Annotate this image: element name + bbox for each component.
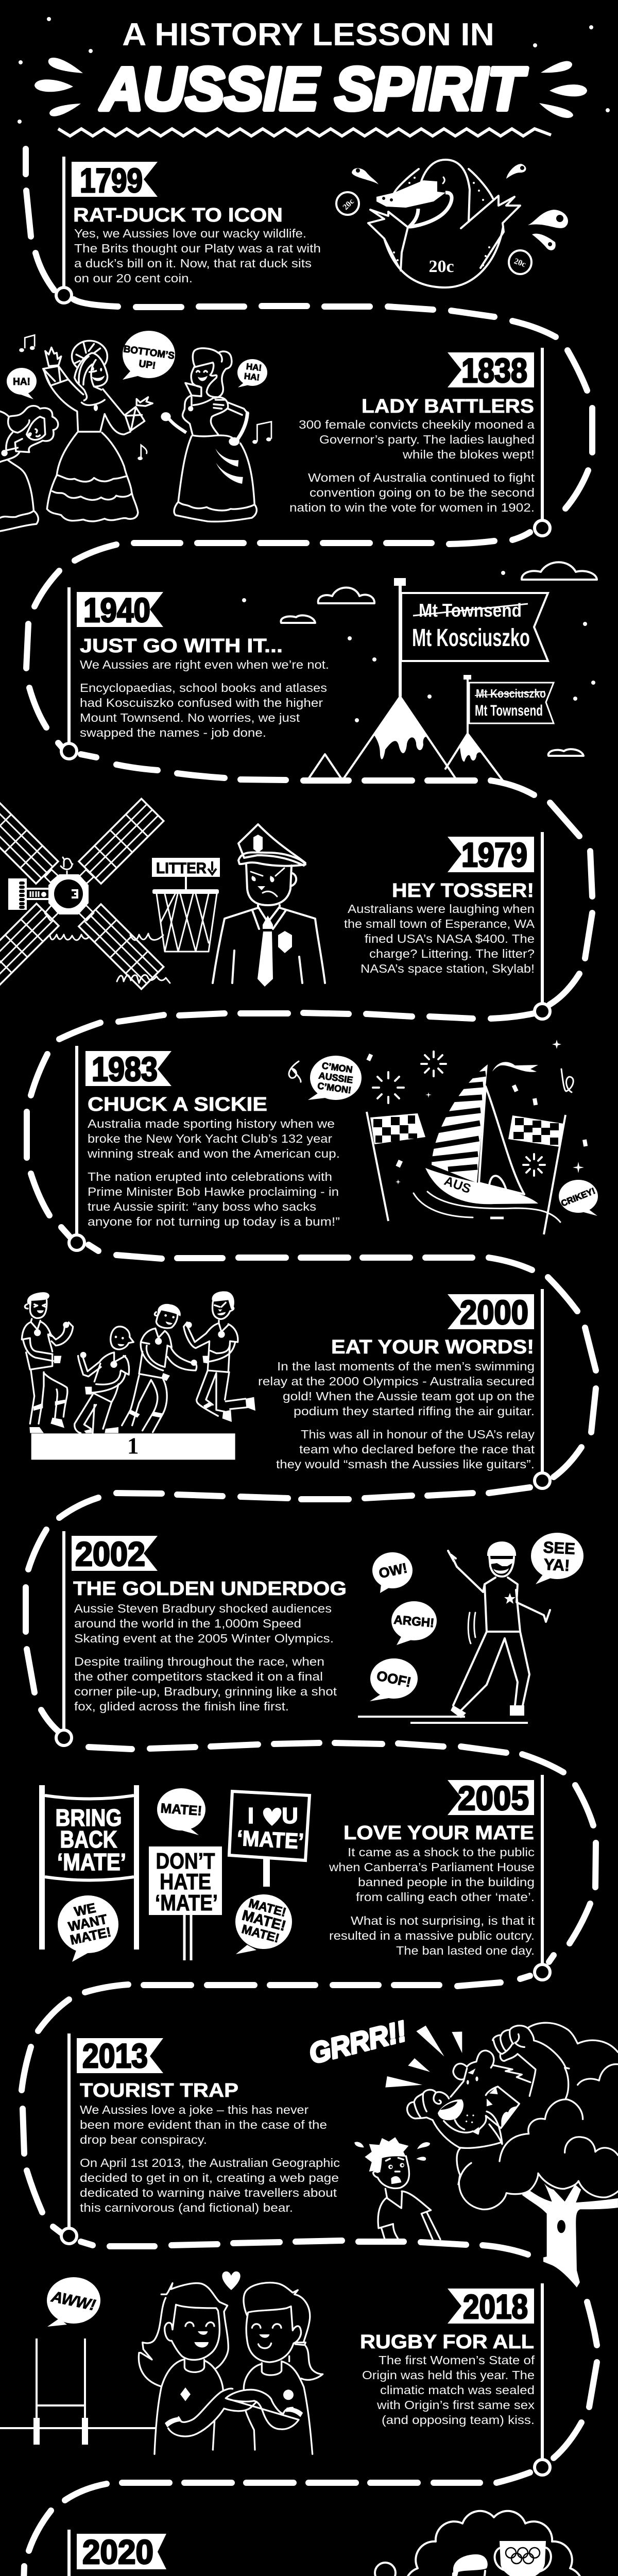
banner: bring back mate	[39, 1785, 139, 1950]
lady centre	[43, 341, 152, 521]
body text	[329, 1845, 535, 1957]
grass	[50, 934, 170, 983]
yacht	[414, 1062, 560, 1222]
speech bubble: aww	[47, 2277, 100, 2327]
body text: Mount Townsend. No worries, we just	[80, 711, 300, 724]
speech bubble: see ya: YA!	[543, 1555, 570, 1574]
speech bubble: c'mon aussie c'mon: C’MON	[321, 1060, 353, 1075]
panel: 2002 the golden underdog	[56, 1531, 583, 1745]
flag pole and node	[535, 1289, 550, 1488]
illustration: litter bin	[152, 858, 220, 952]
heading: LOVE YOUR MATE	[344, 1822, 534, 1844]
clasped arms	[165, 2388, 303, 2450]
illustration: drop bear in tree	[306, 2014, 618, 2287]
speech bubble: ha	[7, 368, 37, 399]
illustration: skylab space station	[0, 799, 170, 989]
body text	[344, 902, 535, 975]
flag pole and node	[61, 587, 77, 759]
illustration: swimmers on podium	[22, 1291, 255, 1460]
speech bubble: c'mon aussie c'mon: AUSSIE	[318, 1070, 354, 1086]
speech bubble: we want mate	[58, 1895, 118, 1962]
body text: This was all in honour of the USA’s relay	[301, 1428, 535, 1441]
panel: 1799 rat-duck to icon	[56, 157, 568, 303]
body text: Governor’s party. The ladies laughed	[319, 433, 535, 446]
big flag: Mt Kosciuszko	[412, 624, 530, 652]
speech bubble: see ya	[531, 1533, 583, 1584]
speech bubble: see ya: SEE	[543, 1538, 576, 1558]
grrr text: GRRR!!	[306, 2014, 409, 2070]
flag pole and node	[535, 2283, 550, 2475]
body text: decided to get in on it, creating a web page	[80, 2171, 339, 2184]
body text	[87, 1117, 340, 1228]
body text: It came as a shock to the public	[348, 1845, 535, 1859]
small flag	[464, 675, 554, 734]
panel: 2018 rugby for all	[0, 2272, 550, 2475]
body text	[80, 658, 329, 739]
speech bubble: ha ha	[237, 359, 267, 387]
speech bubble: mate mate mate: MATE!	[241, 1907, 287, 1934]
lady left cut off	[0, 406, 58, 531]
body text: resulted in a massive public outcry.	[329, 1929, 535, 1942]
speech bubble: mate mate mate	[235, 1894, 292, 1954]
body text: We Aussies are right even when we’re not.	[80, 658, 329, 671]
body text: Despite trailing throughout the race, when	[74, 1655, 324, 1668]
speech bubble: mate: MATE!	[160, 1800, 202, 1819]
speech bubble: oof: OOF!	[375, 1668, 413, 1690]
illustration: platypus on 20 cent coin: 20c	[428, 257, 454, 276]
body text: (and opposing team) kiss.	[382, 2413, 535, 2427]
body text: 300 female convicts cheekily mooned a	[299, 418, 535, 431]
body text: charge? Littering. The litter?	[369, 947, 535, 960]
swimmer with trophy	[407, 2541, 562, 2576]
body text: Australia made sporting history when we	[88, 1117, 335, 1130]
speech bubble: ow	[372, 1552, 413, 1593]
body text: Yes, we Aussies love our wacky wildlife.	[74, 227, 306, 240]
sparkles and confetti	[366, 1040, 588, 1184]
illustration: mountains with flags	[242, 562, 597, 783]
music notes	[19, 335, 271, 460]
sign: don't hate mate	[149, 1846, 222, 1960]
flag pole and node	[535, 348, 550, 536]
heading: HEY TOSSER!	[392, 880, 534, 902]
title	[99, 17, 528, 123]
year flag 2005: 2005	[458, 1779, 529, 1817]
panel: 2000 eat your words	[22, 1289, 550, 1488]
stars	[242, 571, 595, 722]
body text: on our 20 cent coin.	[74, 272, 193, 285]
body text: this carnivorous (and fictional) bear.	[80, 2201, 293, 2214]
big flag	[394, 578, 548, 697]
illustration: platypus on 20 cent coin: 20c	[513, 257, 527, 269]
fireworks	[373, 1052, 545, 1176]
body text: Encyclopaedias, school books and atlases	[80, 681, 327, 694]
body text: the other competitors stacked it on a final	[74, 1670, 323, 1683]
illustration: dancing ladies	[0, 331, 271, 531]
panel: 2020 swim between the flags	[61, 2511, 582, 2576]
year flag 2013: 2013	[82, 2037, 148, 2075]
swimmer 2	[75, 1327, 133, 1433]
year flag 1838: 1838	[461, 351, 527, 389]
body text: convention going on to be the second	[310, 486, 535, 499]
small flag: Mt Kosciuszko	[476, 687, 546, 700]
body text: In the last moments of the men’s swimming	[277, 1360, 535, 1373]
speech bubble: mate mate mate: MATE!	[240, 1922, 281, 1945]
speech bubble: c'mon aussie c'mon: C’MON!	[317, 1080, 352, 1095]
frightened tourist	[354, 2137, 440, 2240]
body text: NASA’s space station, Skylab!	[360, 962, 535, 975]
speech bubble: we want mate: MATE!	[68, 1924, 112, 1948]
body text	[80, 2103, 340, 2214]
speech bubble: ha: HA!	[13, 377, 30, 387]
body text	[289, 418, 535, 514]
body text: Origin was held this year. The	[362, 2368, 535, 2382]
body text: banned people in the building	[358, 1875, 535, 1889]
body text: team who declared before the race that	[299, 1443, 535, 1456]
heading: TOURIST TRAP	[80, 2080, 238, 2102]
speech bubble: ow: OW!	[377, 1560, 408, 1581]
body text: podium they started riffing the air guitar.	[294, 1404, 535, 1418]
body text: a duck’s bill on it. Now, that rat duck sits	[74, 257, 312, 270]
sign: i love u mate	[229, 1791, 310, 1887]
sign: i love u mate: U	[282, 1803, 298, 1828]
speech bubble: we want mate: WANT	[67, 1911, 109, 1935]
body text: corner pile-up, Bradbury, grinning like a shot	[74, 1685, 337, 1698]
speech bubble: ha ha: HA!	[246, 362, 262, 373]
body text: fined USA’s NASA $400. The	[365, 932, 535, 945]
swimmer 4	[184, 1291, 255, 1422]
body text: Australians were laughing when	[348, 902, 535, 916]
body text: On April 1st 2013, the Australian Geographic	[80, 2156, 340, 2170]
heading: THE GOLDEN UNDERDOG	[73, 1578, 347, 1600]
heading: CHUCK A SICKIE	[88, 1094, 267, 1115]
sign: don't hate mate: HATE	[160, 1869, 211, 1894]
flag pole and node	[69, 1046, 84, 1250]
body text: The nation erupted into celebrations with	[88, 1170, 332, 1183]
banner: bring back mate: BRING	[56, 1804, 122, 1831]
body text: with Origin’s first same sex	[376, 2398, 535, 2412]
body text: Prime Minister Bob Hawke proclaiming - in	[88, 1185, 339, 1198]
speech bubble: we want mate: WE	[73, 1900, 97, 1920]
thought bubbles	[361, 2563, 396, 2576]
thought cloud	[405, 2511, 582, 2576]
year flag 1940: 1940	[83, 591, 150, 629]
heading: RUGBY FOR ALL	[360, 2331, 534, 2353]
decorative title dots	[18, 17, 610, 124]
year flag 1983: 1983	[92, 1050, 158, 1088]
speech bubble: c'mon aussie c'mon	[308, 1056, 362, 1100]
panel: 2013 tourist trap	[61, 2014, 618, 2287]
body text: dedicated to warning naive travellers about	[80, 2186, 337, 2199]
bear	[407, 2026, 569, 2184]
podium	[31, 1433, 235, 1460]
body text: fox, glided across the finish line first.	[74, 1700, 289, 1713]
year flag 2018: 2018	[463, 2287, 528, 2326]
body text: from calling each other ‘mate’.	[356, 1890, 535, 1904]
yacht: AUS	[442, 1174, 473, 1196]
heading: LADY BATTLERS	[362, 396, 534, 417]
body text: We Aussies love a joke – this has never	[80, 2103, 308, 2116]
goal posts	[0, 2338, 156, 2445]
body text: winning streak and won the American cup.	[87, 1147, 340, 1160]
speech bubble: bottom's up	[123, 331, 175, 380]
speech bubble: bottom's up: BOTTOM’S	[123, 344, 175, 362]
mountains	[309, 697, 505, 783]
illustration: kissing players and goal posts	[0, 2272, 323, 2454]
body text	[74, 227, 321, 285]
body text	[258, 1360, 535, 1471]
sign: i love u mate: ‘MATE’	[236, 1826, 304, 1853]
body text: nation to win the vote for women in 1902.	[289, 501, 535, 514]
banner: bring back mate: BACK	[60, 1826, 117, 1853]
body text: around the world in the 1,000m Speed	[74, 1617, 301, 1630]
panel: 1838 lady battlers	[0, 331, 550, 536]
body text: Women of Australia continued to fight	[308, 471, 535, 484]
flag pole and node	[56, 1531, 72, 1745]
flag pole and node	[56, 157, 72, 303]
illustration: speed skater	[358, 1533, 583, 1723]
body text	[74, 1602, 337, 1713]
body text: climatic match was sealed	[380, 2383, 535, 2397]
body text	[362, 2353, 535, 2427]
body text: drop bear conspiracy.	[80, 2133, 207, 2146]
title splash drops	[35, 58, 587, 118]
panel: 1979 hey tosser	[0, 799, 550, 1019]
illustration: yacht celebration	[289, 1040, 598, 1234]
illustration: protest signs	[39, 1785, 310, 1962]
heading: EAT YOUR WORDS!	[331, 1336, 534, 1358]
body text: while the blokes wept!	[402, 448, 535, 461]
player right	[244, 2283, 323, 2454]
year flag 1799: 1799	[80, 161, 143, 199]
speech bubble: mate	[157, 1788, 205, 1835]
year flag 2002: 2002	[75, 1535, 145, 1573]
title: AUSSIE SPIRIT	[99, 55, 528, 123]
flag pole and node	[61, 2530, 77, 2576]
player left	[139, 2283, 228, 2454]
flag pole and node	[535, 1775, 550, 1980]
sign: don't hate mate: ‘MATE’	[155, 1890, 218, 1916]
illustration: man dreaming of olympic gold	[291, 2511, 582, 2576]
illustration: policeman	[213, 824, 325, 987]
year flag 2000: 2000	[460, 1293, 528, 1331]
body text: Skating event at the 2005 Winter Olympics.	[74, 1632, 334, 1645]
speech bubble: argh: ARGH!	[393, 1613, 435, 1630]
body text: What is not surprising, is that it	[351, 1914, 535, 1927]
body text: The ban lasted one day.	[396, 1944, 535, 1957]
small flag: Mt Townsend	[475, 702, 543, 719]
body text: The first Women’s State of	[379, 2353, 535, 2367]
body text: true Aussie spirit: “any boss who sacks	[88, 1200, 316, 1213]
shout spikes	[385, 2026, 462, 2088]
sign: don't hate mate: DON’T	[156, 1849, 215, 1874]
swimmer 3	[122, 1304, 197, 1432]
panel: 1940 just go with it	[61, 562, 597, 783]
year flag 2020: 2020	[82, 2533, 153, 2571]
body text: broke the New York Yacht Club’s 132 year	[88, 1132, 332, 1145]
zigzag divider	[58, 129, 551, 136]
year flag 1979: 1979	[461, 836, 527, 874]
flag pole and node	[535, 832, 550, 1019]
speech bubble: crikey	[559, 1180, 598, 1216]
lady right	[161, 348, 256, 521]
illustration: platypus on 20 cent coin: 20c	[341, 197, 356, 212]
banner: bring back mate: ‘MATE’	[57, 1849, 126, 1875]
flags	[367, 1112, 565, 1234]
illustration: platypus on 20 cent coin	[336, 160, 568, 287]
speech bubble: ha ha: HA!	[244, 371, 260, 382]
body text: gold! When the Aussie team got up on the	[283, 1389, 535, 1403]
tree	[459, 2023, 618, 2287]
body text: been more evident than in the case of the	[80, 2118, 327, 2131]
panel: 1983 chuck a sickie	[69, 1040, 598, 1250]
speech bubble: argh	[391, 1601, 437, 1645]
panel: 2005 love your mate	[39, 1775, 550, 1980]
swimmer 1	[22, 1292, 73, 1433]
heart	[222, 2272, 241, 2290]
illustration: litter bin: LITTER	[156, 860, 207, 877]
speech bubble: crikey: CRIKEY!	[560, 1186, 597, 1209]
speech bubble: bottom's up: UP!	[138, 359, 157, 371]
body text: the small town of Esperance, WA	[344, 917, 535, 930]
body text: anyone for not turning up today is a bum!”	[88, 1215, 340, 1228]
body text: had Koscuiszko confused with the higher	[80, 696, 323, 709]
body text: when Canberra’s Parliament House	[329, 1860, 535, 1874]
body text: swapped the names - job done.	[80, 726, 266, 739]
heading: JUST GO WITH IT...	[80, 635, 283, 657]
body text: they would “smash the Aussies like guitars”.	[276, 1458, 535, 1471]
flag pole and node	[61, 2033, 77, 2244]
heading: RAT-DUCK TO ICON	[73, 205, 283, 226]
body text: The Brits thought our Platy was a rat with	[74, 242, 321, 255]
big flag: Mt Townsend	[419, 600, 522, 621]
body text: Aussie Steven Bradbury shocked audiences	[74, 1602, 332, 1615]
speech bubble: mate mate mate: MATE!	[247, 1896, 287, 1920]
speech bubble: aww: AWW!	[49, 2288, 97, 2314]
title: A HISTORY LESSON IN	[122, 17, 494, 53]
body text: relay at the 2000 Olympics - Australia secured	[258, 1375, 535, 1388]
speech bubble: oof	[370, 1658, 418, 1701]
podium: 1	[127, 1433, 139, 1459]
sign: i love u mate: I	[248, 1803, 254, 1828]
clouds	[281, 562, 597, 756]
